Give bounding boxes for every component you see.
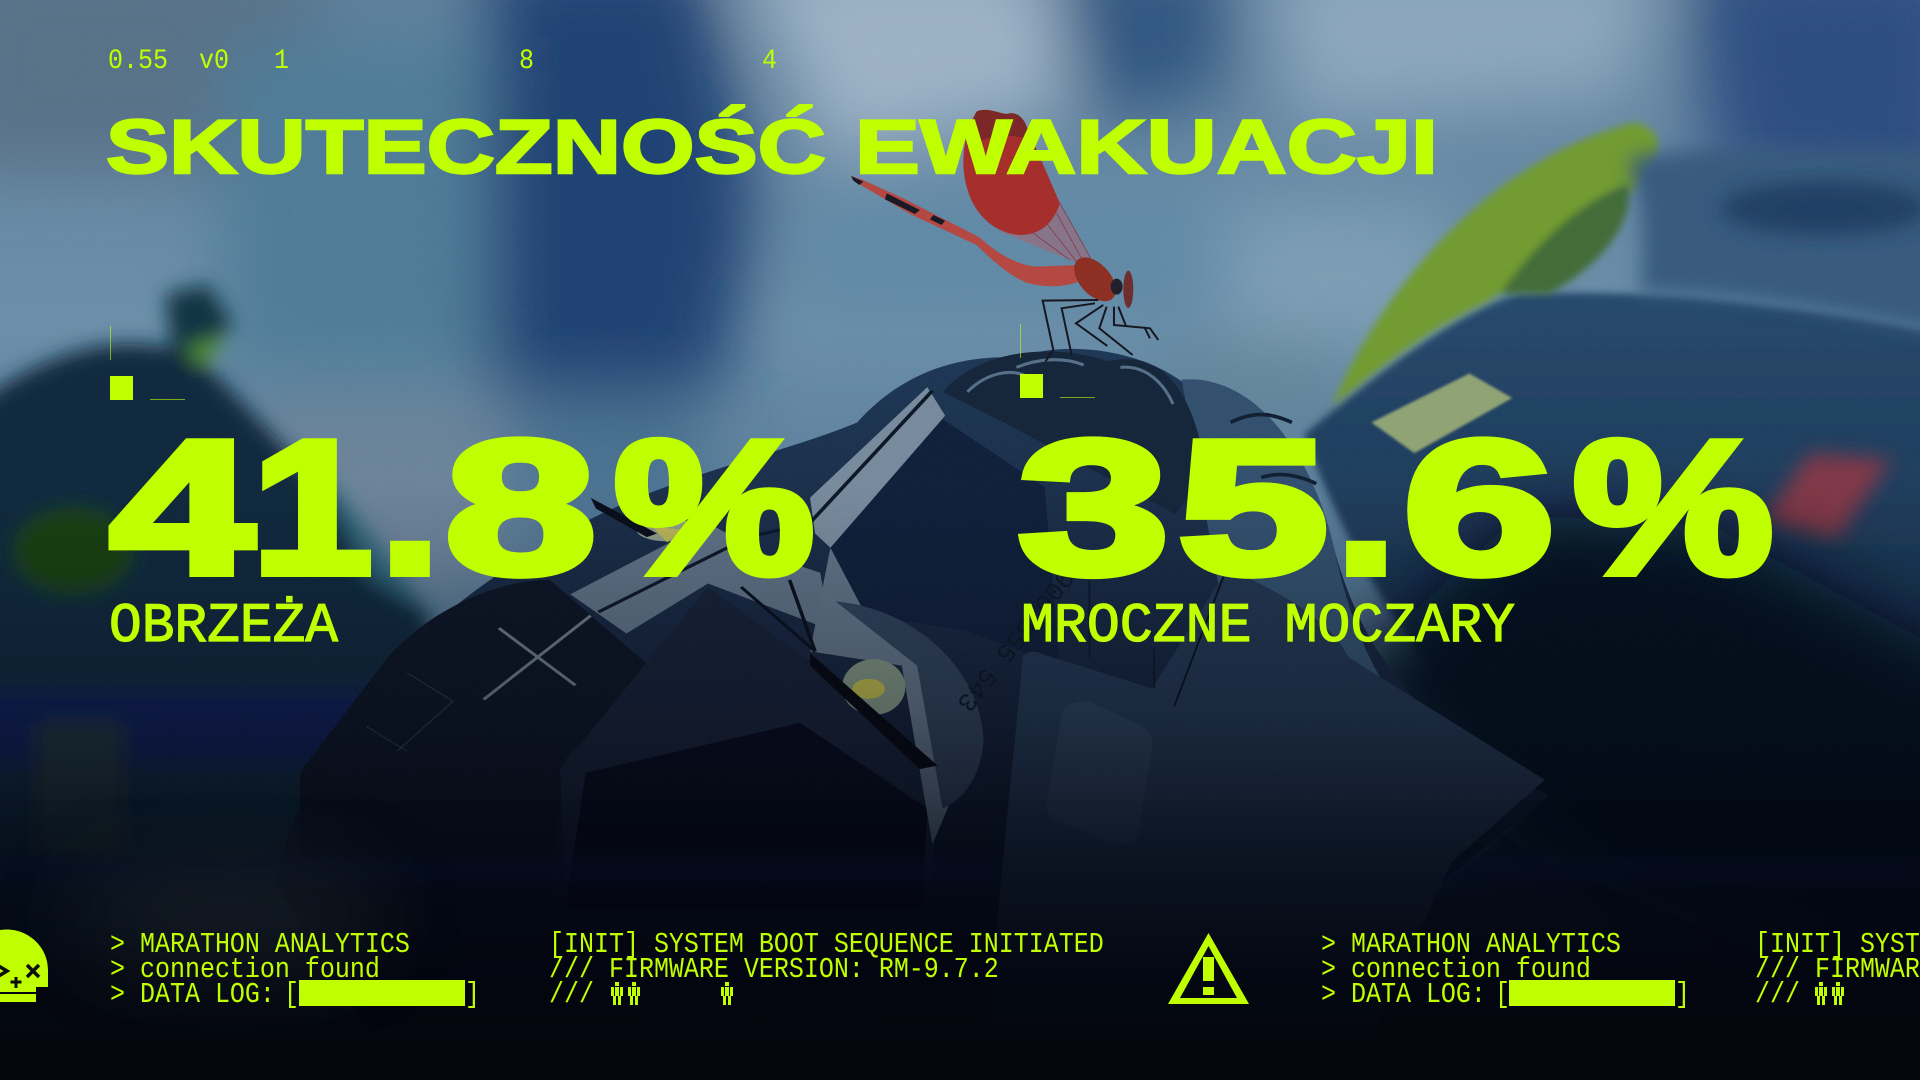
- boot log 2: [1755, 930, 1920, 1012]
- icon: people: [611, 982, 733, 1005]
- icon: skull: [0, 929, 48, 1002]
- value 35.6%: 3: [1018, 401, 1169, 614]
- top meta readout: 4: [762, 45, 777, 76]
- log lines: ///: [549, 980, 594, 1012]
- icon: people: [1815, 982, 1844, 1005]
- terminal block 1: [110, 930, 480, 1012]
- right shoulder: [1200, 293, 1920, 1080]
- terminal block 2: [1321, 930, 1690, 1012]
- robot head: [276, 349, 1549, 1029]
- value 35.6%: [1018, 401, 1773, 614]
- icon: warning triangle: [1168, 933, 1249, 1004]
- status lines: [1321, 930, 1690, 1012]
- value 41.8%: [110, 401, 814, 614]
- label Obrzeża: OBRZEŻA: [109, 594, 338, 658]
- boot log 1: [549, 930, 1104, 1012]
- dark shoulder hollow: [1335, 514, 1920, 1053]
- value 41.8%: 1: [252, 402, 372, 614]
- log lines: [INIT] SYST: [1755, 930, 1920, 962]
- status lines: > connection found: [1321, 955, 1591, 987]
- marker: tick, square and dash: [1020, 324, 1095, 398]
- log lines: [INIT] SYSTEM BOOT SEQUENCE INITIATED: [549, 930, 1104, 962]
- top meta readout: 8: [519, 45, 534, 76]
- top meta readout: v0: [199, 45, 229, 76]
- status lines: > MARATHON ANALYTICS: [110, 930, 410, 962]
- log lines: /// FIRMWARE VERSION: RM-9.7.2: [549, 955, 999, 987]
- value 41.8%: 8: [445, 401, 596, 614]
- status lines: > MARATHON ANALYTICS: [1321, 930, 1621, 962]
- stat: Mroczne Moczary: [1018, 324, 1773, 658]
- log lines: [549, 930, 1104, 1012]
- green leaf: [1332, 122, 1658, 407]
- title: EWAKUACJI: [855, 105, 1438, 190]
- title: SKUTECZNOŚĆ: [106, 105, 826, 190]
- value 35.6%: 6: [1403, 401, 1555, 613]
- value 35.6%: %: [1573, 402, 1773, 614]
- lower faint stripe: [0, 857, 1920, 887]
- stat: Obrzeża: [109, 326, 814, 658]
- top meta readout: 1: [274, 45, 289, 76]
- status lines: > connection found: [110, 955, 380, 987]
- status lines: ]: [1675, 980, 1690, 1012]
- status lines: [: [284, 980, 299, 1012]
- status lines: > DATA LOG:: [1321, 980, 1486, 1012]
- value 41.8%: .: [380, 402, 440, 614]
- data log bar: [299, 980, 465, 1006]
- engraved numbers on helmet: 900 655 543: [950, 563, 1079, 717]
- grain: [0, 0, 1920, 800]
- log lines: [1755, 930, 1920, 1012]
- top lumps: [943, 351, 1206, 514]
- value 35.6%: .: [1336, 402, 1396, 614]
- top meta readout: 0.55: [108, 45, 168, 76]
- marker: tick, square and dash: [110, 326, 185, 400]
- status lines: ]: [465, 980, 480, 1012]
- log lines: ///: [1755, 980, 1800, 1012]
- data log bar: [1509, 980, 1675, 1006]
- status lines: [110, 930, 480, 1012]
- cheek and chin plates: [987, 568, 1545, 1059]
- head panels in zoom coords: [300, 387, 1060, 937]
- status lines: > DATA LOG:: [110, 980, 275, 1012]
- value 41.8%: 4: [110, 402, 254, 614]
- value 41.8%: %: [614, 402, 814, 614]
- tire shape: [1182, 379, 1427, 735]
- red dragonfly: [851, 110, 1158, 362]
- top meta readout: [108, 45, 777, 76]
- value 35.6%: 5: [1178, 402, 1328, 614]
- blurred sky and towers: [0, 0, 1920, 600]
- status lines: [: [1495, 980, 1510, 1012]
- log lines: /// FIRMWAR: [1755, 955, 1920, 987]
- title: [106, 105, 1438, 190]
- label Mroczne Moczary: MROCZNE MOCZARY: [1021, 594, 1515, 658]
- left blurred figure: [0, 284, 453, 980]
